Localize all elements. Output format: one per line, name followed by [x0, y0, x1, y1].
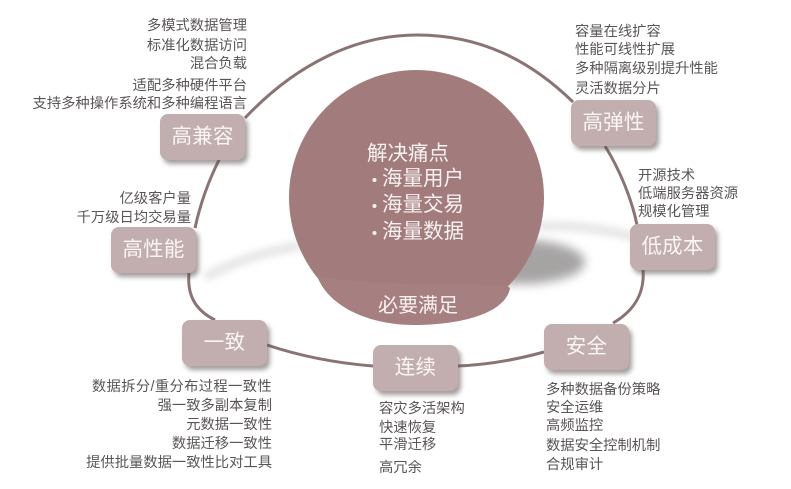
text: security notes: 数据安全控制机制: [546, 438, 660, 454]
central pain points text: 海量用户: [382, 167, 464, 190]
central pain points text: •: [372, 225, 377, 242]
text: continuity notes: 高冗余: [379, 460, 422, 476]
text: consistency notes: 数据迁移一致性: [172, 436, 272, 452]
box: 高兼容: [160, 114, 245, 160]
text: consistency notes: 强一致多副本复制: [158, 398, 272, 414]
central circle: [289, 70, 544, 286]
text: cost notes: 低端服务器资源: [638, 186, 738, 202]
text: cost notes: 开源技术: [638, 168, 695, 184]
box: 安全: 安全: [566, 335, 607, 358]
central pain points text: 海量交易: [382, 193, 464, 216]
box: 低成本: 低成本: [641, 235, 704, 258]
central pain points text: 海量数据: [382, 220, 464, 243]
text: continuity notes: [379, 400, 465, 476]
text: compatibility notes: 多模式数据管理: [147, 18, 247, 34]
text: continuity notes: 容灾多活架构: [379, 401, 465, 417]
text: performance notes: [77, 190, 191, 226]
text: security notes: 安全运维: [546, 400, 603, 416]
box: 安全: [544, 324, 629, 370]
base label: 必要满足: [378, 294, 458, 317]
text: consistency notes: 元数据一致性: [186, 417, 272, 433]
text: compatibility notes: 标准化数据访问: [147, 38, 247, 54]
text: elasticity notes: 多种隔离级别提升性能: [575, 61, 718, 77]
text: security notes: 高频监控: [546, 418, 603, 434]
text: consistency notes: 数据拆分/重分布过程一致性: [92, 379, 272, 395]
central pain points text: 解决痛点: [367, 142, 449, 165]
central pain points text: •: [372, 172, 377, 189]
text: security notes: 多种数据备份策略: [546, 382, 660, 398]
box: 高性能: [111, 227, 196, 273]
text: performance notes: 亿级客户量: [120, 191, 191, 207]
box: 高弹性: 高弹性: [582, 111, 645, 134]
text: cost notes: 规模化管理: [638, 204, 709, 220]
text: elasticity notes: 容量在线扩容: [575, 24, 661, 40]
text: compatibility notes: 适配多种硬件平台: [133, 78, 247, 94]
box: 一致: [182, 320, 267, 366]
text: security notes: [546, 382, 660, 473]
box: 连续: 连续: [395, 356, 436, 379]
text: continuity notes: 快速恢复: [379, 420, 436, 436]
text: consistency notes: 提供批量数据一致性比对工具: [86, 455, 272, 471]
central pain points text: •: [372, 198, 377, 215]
text: elasticity notes: 性能可线性扩展: [575, 42, 675, 58]
box: 高兼容: 高兼容: [171, 125, 234, 148]
text: elasticity notes: [575, 24, 718, 97]
box: 高性能: 高性能: [122, 238, 185, 261]
box: 低成本: [630, 224, 715, 270]
box: 高弹性: [571, 100, 656, 146]
box: 连续: [373, 345, 458, 391]
text: consistency notes: [86, 378, 272, 471]
text: compatibility notes: 混合负载: [190, 56, 247, 72]
text: elasticity notes: 灵活数据分片: [575, 81, 661, 97]
text: performance notes: 千万级日均交易量: [77, 210, 191, 226]
text: compatibility notes: 支持多种操作系统和多种编程语言: [33, 96, 247, 112]
text: cost notes: [638, 168, 738, 220]
box: 一致: 一致: [204, 331, 245, 354]
text: compatibility notes: [33, 18, 247, 112]
text: continuity notes: 平滑迁移: [379, 437, 436, 453]
text: security notes: 合规审计: [546, 457, 603, 473]
central pain points text: [367, 142, 464, 243]
central base: [318, 278, 510, 325]
